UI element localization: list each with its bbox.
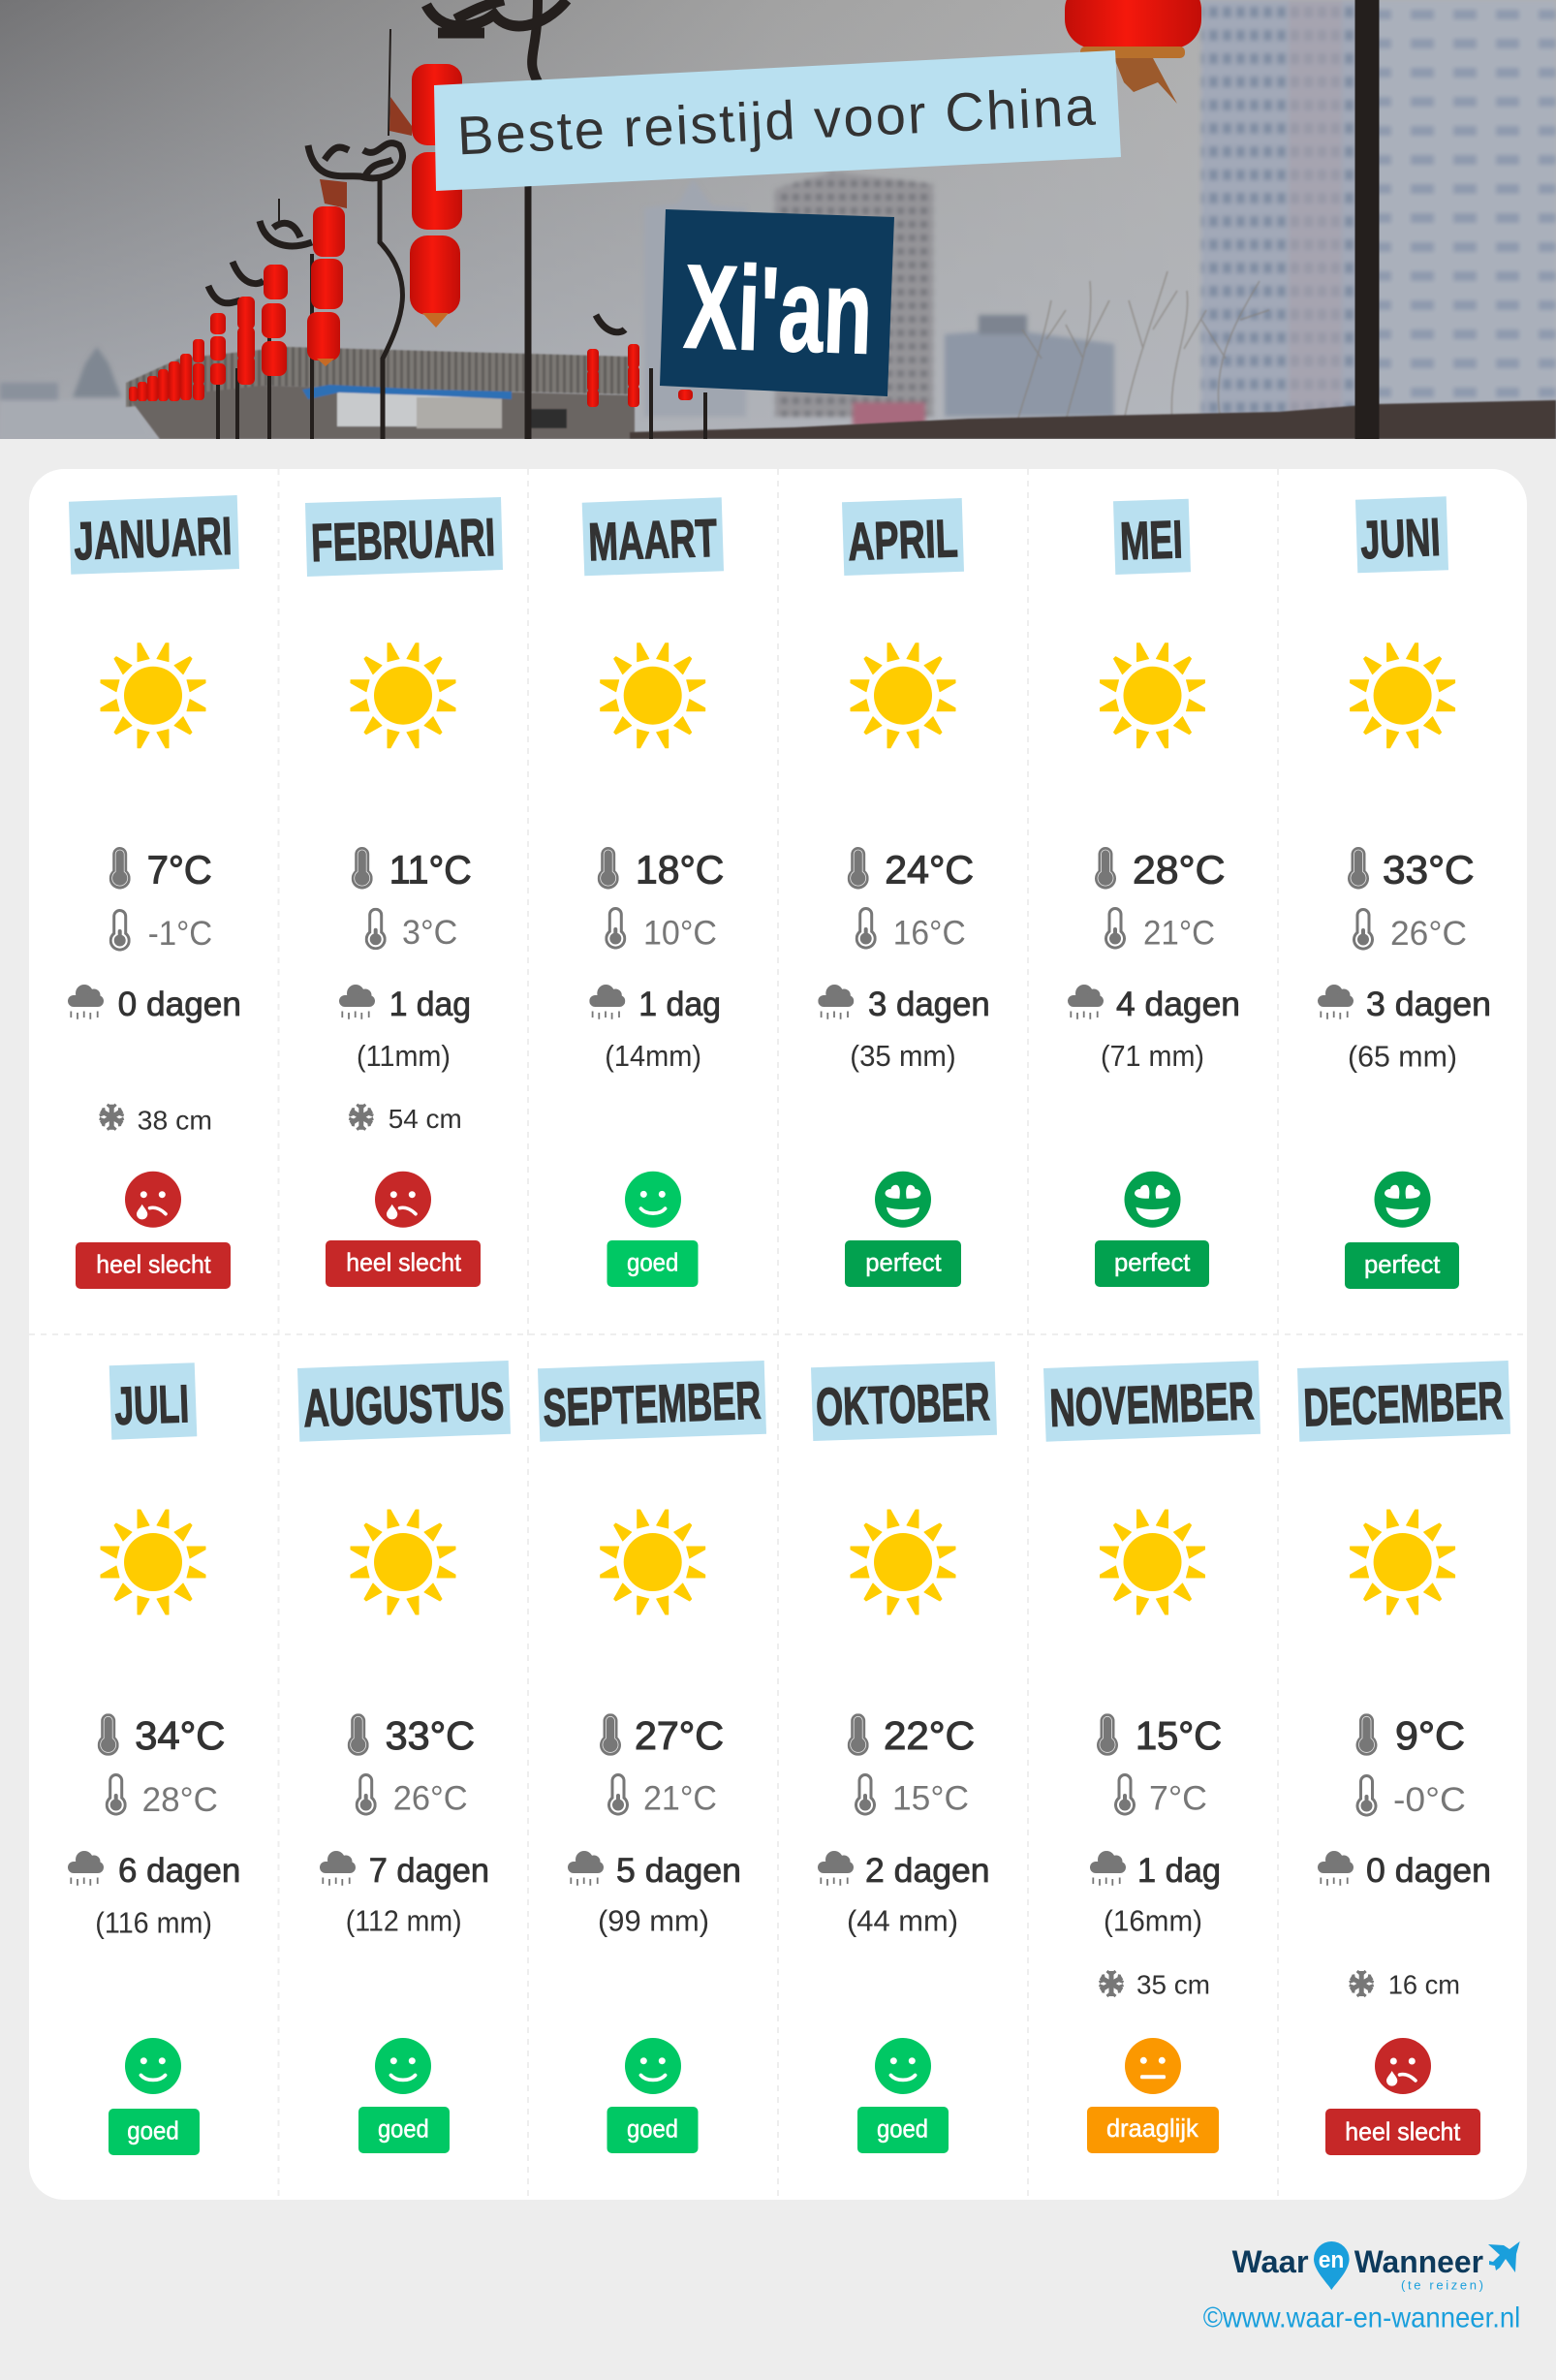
high temperature [109,847,212,892]
heading: mei [1113,499,1191,575]
rain days: 6 dagen [118,1852,240,1890]
rain days: 3 dagen [868,986,990,1023]
rating face: good [375,2038,431,2094]
title banner [434,50,1121,191]
rating label: heel slecht [96,1249,211,1278]
logo: Waar en Wanneer: Waar [1232,2244,1309,2279]
heading: maart [582,497,724,576]
rating label: heel slecht [1345,2116,1461,2145]
low temperature: 21°C [1143,915,1215,952]
heading: april [842,498,964,576]
panel: juni [1318,496,1491,1289]
precipitation: (35 mm) [850,1039,956,1073]
rain days [818,1851,990,1890]
heading: juli [109,1362,197,1440]
rating face: good [875,2038,931,2094]
website url: ©www.waar-en-wanneer.nl [1203,2302,1520,2334]
rating face: perfect [875,1172,931,1228]
rain days: 3 dagen [1366,986,1491,1023]
city name block [660,209,894,396]
snow [349,1104,462,1134]
high temperature: 11°C [389,848,472,892]
rating label [76,1242,231,1289]
logo: Waar en Wanneer: Wanneer [1354,2244,1483,2279]
rating face: good [125,2038,181,2094]
high temperature [1348,847,1475,892]
high temperature: 22°C [884,1713,975,1758]
heading: februari [305,497,503,577]
rating label [1325,2109,1480,2155]
heading: september [538,1361,766,1442]
rating label: perfect [1114,1248,1191,1277]
high temperature [352,847,472,892]
low temperature [1114,1773,1207,1817]
panel: december [1297,1361,1510,2155]
panel: maart [582,497,724,1287]
rain days: 2 dagen [865,1852,990,1890]
low temperature: 26°C [393,1779,468,1817]
high temperature: 33°C [386,1713,475,1758]
high temperature [1097,1713,1222,1758]
rain days [320,1851,489,1890]
heading: november [1043,1361,1260,1442]
snow [1350,1969,1460,1999]
rain days: 5 dagen [616,1852,741,1890]
snow [100,1105,212,1136]
low temperature [106,1773,218,1819]
rating label [1345,1242,1459,1289]
icon: sun [851,643,955,748]
precipitation: (71 mm) [1101,1039,1204,1073]
rating label [326,1240,481,1287]
panel: april [818,498,990,1287]
white calendar card [29,469,1527,2200]
rain days [589,985,721,1023]
panel: januari [68,495,241,1289]
city wall and building [126,347,1556,439]
heading: augustus: AUGUSTUS [302,1371,505,1438]
rating label [1095,1240,1209,1287]
high temperature [848,847,974,892]
high temperature: 18°C [636,848,724,892]
low temperature [365,908,457,952]
low temperature: 15°C [892,1779,969,1817]
rating label: goed [627,2114,678,2144]
rating label: goed [378,2114,429,2144]
rating face: tolerable [1125,2038,1181,2094]
rain days: 1 dag [1137,1852,1221,1890]
rain days: 1 dag [389,986,471,1023]
rating label [607,1240,698,1287]
rating label [1087,2107,1219,2153]
icon: location pin: en [1319,2247,1344,2273]
snow [1099,1969,1210,1999]
panel: mei [1068,499,1240,1287]
high temperature [848,1713,975,1758]
high temperature: 27°C [635,1713,724,1758]
rain days: 4 dagen [1116,986,1240,1023]
icon: sun [1101,643,1205,748]
city name block: Xi'an [682,240,875,380]
icon: sun [601,643,705,748]
low temperature [1356,1774,1466,1819]
high temperature: 24°C [885,848,974,892]
rain days: 0 dagen [118,986,241,1023]
low temperature: 3°C [402,914,457,952]
heading: februari: FEBRUARI [310,507,496,573]
precipitation: (99 mm) [598,1904,709,1938]
icon: sun [351,643,455,748]
panel: november [1043,1361,1260,2153]
high temperature [1095,847,1225,892]
rain days [818,985,990,1023]
rating label [607,2107,698,2153]
rain days [68,1851,240,1890]
precipitation: (116 mm) [95,1905,212,1939]
icon: sun [1351,643,1455,748]
icon: sun [1351,1510,1455,1614]
snow: 54 cm [389,1104,462,1134]
high temperature: 9°C [1395,1713,1465,1758]
high temperature [348,1713,475,1758]
panel: juli [68,1362,240,2155]
rating label [358,2107,450,2153]
rating face: very bad [375,1172,431,1228]
rating label: heel slecht [346,1248,462,1277]
heading: januari [69,495,239,575]
low temperature: -1°C [148,915,212,953]
panel: september [538,1361,766,2153]
title banner: Beste reistijd voor China [455,75,1098,167]
precipitation: (11mm) [357,1039,451,1073]
rating label: goed [127,2115,179,2145]
rating label: goed [627,1248,678,1277]
precipitation: (65 mm) [1348,1039,1457,1074]
rain days [1090,1851,1221,1890]
panel: augustus [297,1361,511,2153]
low temperature: 7°C [1149,1779,1207,1817]
precipitation: (112 mm) [346,1904,462,1938]
panel: oktober [811,1362,997,2153]
heading: november: NOVEMBER [1048,1370,1255,1438]
rain days [1068,985,1240,1023]
rain days [1318,1851,1491,1890]
high temperature [98,1713,225,1758]
rain days [568,1851,741,1890]
red lanterns [129,0,1201,407]
icon: sun [851,1510,955,1614]
rain days [1318,985,1491,1023]
high temperature: 33°C [1383,848,1475,892]
low temperature: 26°C [1390,915,1467,953]
icon: sun [101,1510,205,1614]
rain days [68,985,241,1023]
rating label: perfect [865,1248,942,1277]
panel: februari [305,497,503,1287]
high temperature: 7°C [147,848,212,892]
rating face: perfect [1124,1172,1180,1228]
heading: oktober [811,1362,997,1441]
rating face: good [625,1172,681,1228]
icon: sun [101,643,205,748]
icon: sun [351,1510,455,1614]
low temperature: 10°C [643,915,717,952]
rain days [339,985,471,1023]
low temperature [1353,908,1467,953]
rating face: perfect [1374,1172,1430,1228]
precipitation: (44 mm) [847,1904,958,1938]
heading: september: SEPTEMBER [542,1370,762,1438]
heading: mei: MEI [1119,509,1184,571]
heading: januari: JANUARI [73,506,233,571]
low temperature [856,907,966,952]
rain days: 1 dag [638,986,721,1023]
rating label [845,1240,961,1287]
low temperature: -0°C [1393,1781,1466,1819]
rating label [109,2109,200,2155]
heading: juni: JUNI [1359,507,1442,570]
poles and dragon ornaments [208,0,1374,439]
heading: oktober: OKTOBER [815,1371,991,1437]
high temperature [598,847,724,892]
heading: maart: MAART [587,508,718,572]
rating label [857,2107,949,2153]
header photo: Xi'an city wall with red lanterns [0,0,1556,439]
snow: 38 cm [138,1106,212,1136]
rain days: 7 dagen [369,1852,489,1890]
heading: augustus [297,1361,511,1442]
rating label: perfect [1364,1250,1441,1279]
low temperature: 28°C [142,1781,218,1819]
low temperature [356,1773,468,1817]
logo: Waar en Wanneer: (te reizen) [1401,2278,1483,2293]
logo: Waar en Wanneer [1232,2241,1520,2293]
low temperature: 16°C [893,915,966,952]
rating label: goed [877,2114,928,2144]
precipitation: (16mm) [1104,1904,1202,1938]
high temperature: 34°C [135,1713,225,1758]
precipitation: (14mm) [605,1039,701,1073]
snow: 16 cm [1388,1969,1460,1999]
icon: airplane [1488,2241,1520,2272]
heading: juli: JULI [113,1373,190,1436]
high temperature: 28°C [1133,848,1225,892]
low temperature [607,1773,717,1817]
icon: sun [1101,1510,1205,1614]
rain days: 0 dagen [1366,1852,1491,1890]
low temperature: 21°C [643,1779,717,1817]
rating label: draaglijk [1106,2114,1199,2143]
rating face: good [625,2038,681,2094]
low temperature [1105,907,1215,952]
high temperature [1356,1713,1465,1758]
icon: sun [601,1510,705,1614]
rating face: very bad [125,1172,181,1228]
low temperature [109,909,212,953]
heading: juni [1355,496,1448,573]
icon: location pin [1314,2241,1350,2290]
high temperature: 15°C [1136,1713,1222,1758]
low temperature [855,1773,969,1817]
heading: april: APRIL [847,508,959,572]
snow: 35 cm [1136,1969,1210,1999]
rating face: very bad [1375,2038,1431,2094]
low temperature [605,907,717,952]
